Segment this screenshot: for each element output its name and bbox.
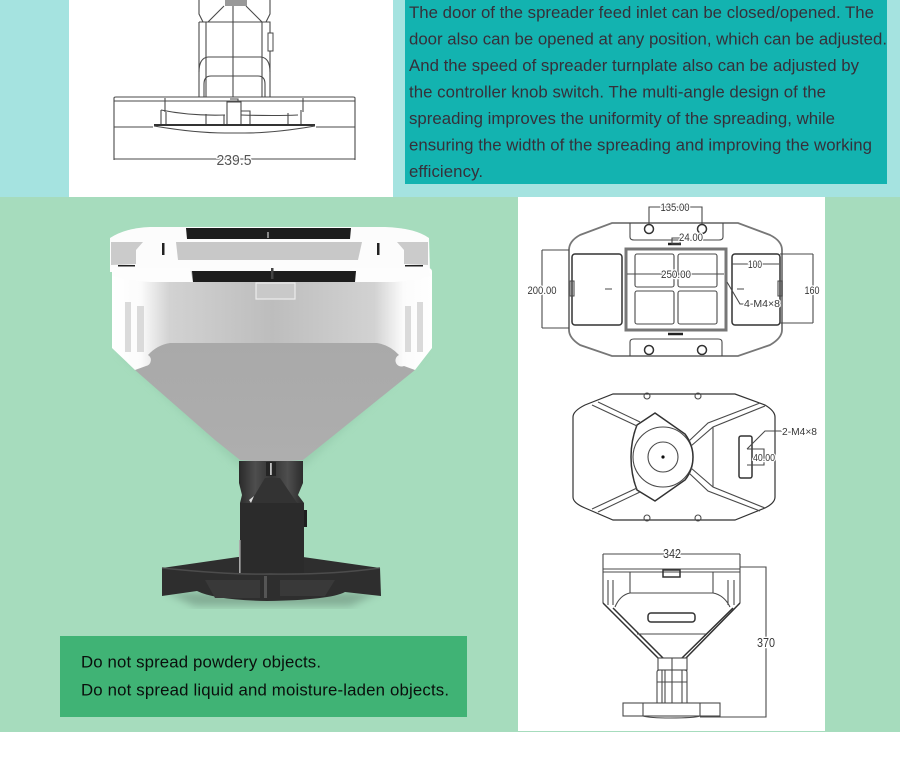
top band background [0, 0, 900, 197]
dimension labels: top view: 24.00 [679, 232, 703, 244]
drawing: bottom view [573, 393, 817, 521]
product illustration: fertilizer spreader [110, 227, 432, 606]
hopper lower body [112, 268, 432, 400]
panel: spreader description: efficiency. [409, 162, 483, 181]
dimension labels: top view: 160 [804, 285, 820, 297]
panel: dimension drawings [518, 197, 825, 731]
dimension labels: side view: 342 [663, 547, 681, 561]
dimension labels: top view: 200.00 [528, 285, 556, 297]
dimension labels: top view: 135.00 [660, 202, 690, 214]
drawing: side view [603, 547, 775, 718]
dimension labels: bottom view: 2-M4×8 [782, 427, 817, 438]
turnplate [162, 557, 381, 601]
panel: spreader description [405, 0, 887, 184]
callout: spreading warnings: Do not spread powdery objects. [81, 652, 321, 672]
panel: spreader description: The door of the spreader feed inlet can be closed/opened. The [409, 3, 874, 22]
dimension labels: top view [528, 202, 820, 310]
hopper cone [135, 343, 415, 462]
panel: spreader description: spreading improves the uniformity of the spreading, while [409, 109, 835, 128]
dimension labels: side view [663, 547, 775, 650]
dimension labels: bottom view [753, 427, 817, 464]
panel: spreader description: ensuring the width of the spreading and improving the working [409, 136, 872, 154]
dimension labels: top view: 100 [748, 259, 762, 271]
panel: spreader description: And the speed of spreader turnplate also can be adjusted by [409, 56, 860, 75]
dimension labels: top view: 250.00 [661, 269, 691, 281]
panel: spreader description: the controller knob switch. The multi-angle design of the [409, 82, 826, 102]
dimension labels: side view: 370 [757, 636, 775, 650]
dimension labels: bottom view: 40.00 [753, 453, 775, 464]
neck [239, 461, 304, 503]
panel: turnplate technical drawing [69, 0, 393, 197]
callout: spreading warnings [60, 636, 467, 717]
hopper upper body [110, 227, 430, 272]
motor block [240, 503, 304, 573]
dimension labels: top view: 4-M4×8 [744, 299, 780, 310]
dimension label: 239.5: 239.5 [216, 152, 252, 169]
callout: spreading warnings: Do not spread liquid and moisture-laden objects. [81, 680, 449, 700]
drawing: top view [528, 202, 820, 356]
panel: spreader description: door also can be opened at any position, which can be adjusted. [409, 30, 887, 48]
lower band background [0, 197, 900, 732]
